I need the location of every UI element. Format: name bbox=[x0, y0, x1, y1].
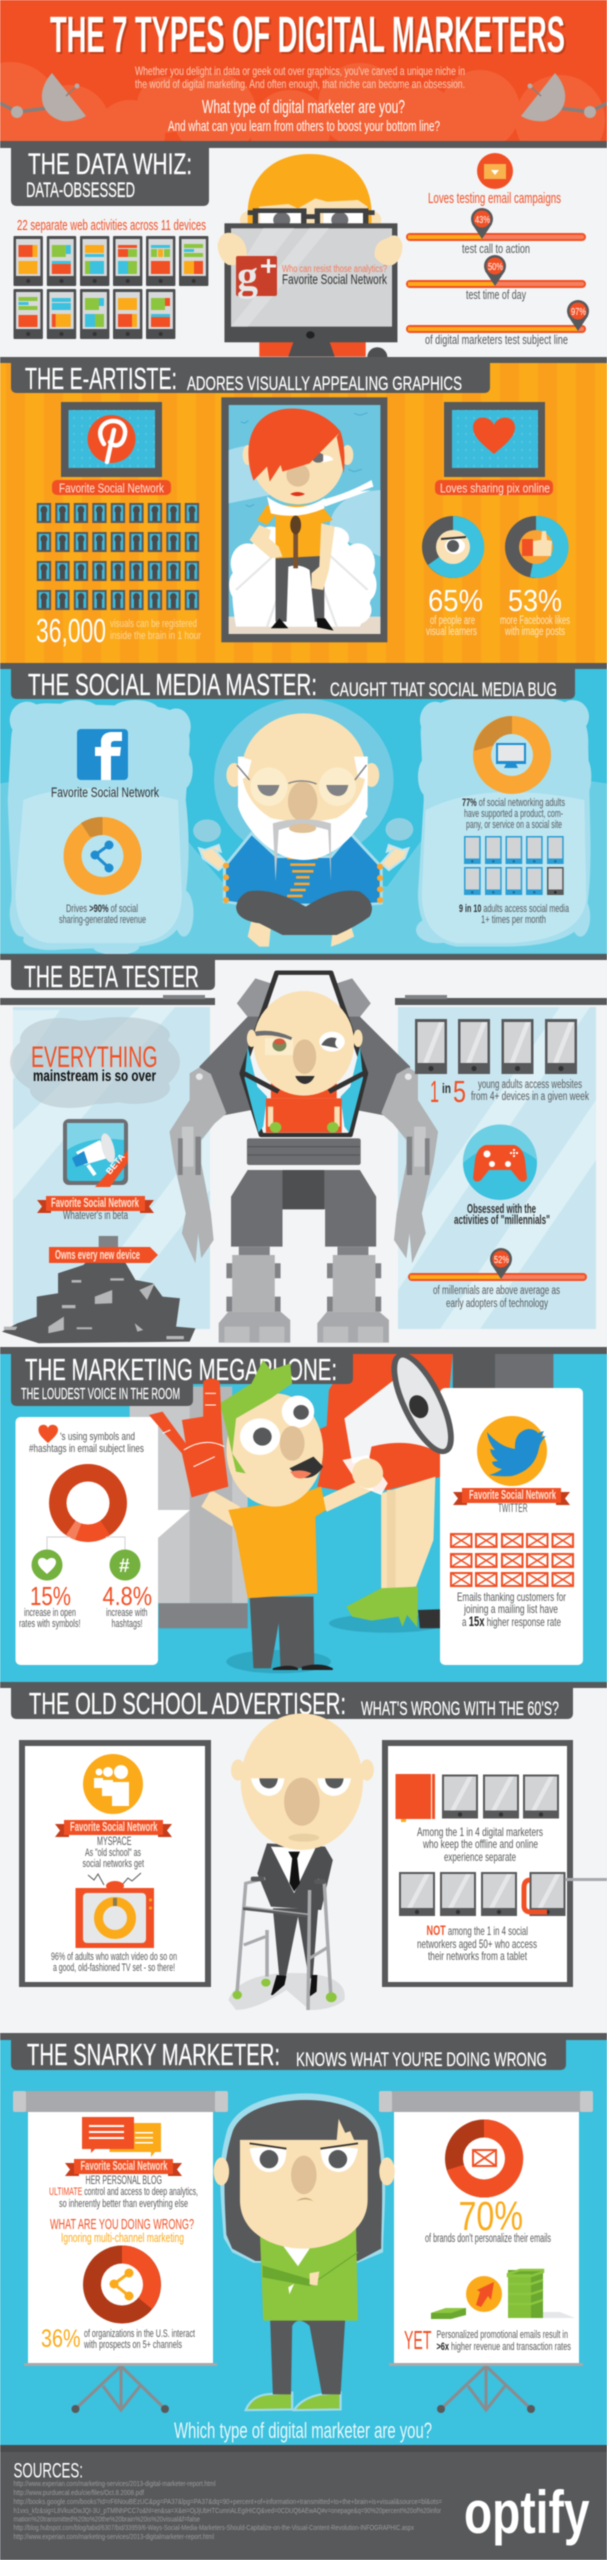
source list: h1vxs_kfz&sig=L8VkuxDwJQI-3U_pTMlNhPCC7o&hl=en&sa=X&ei=OjJjUbHTCumriALEgIHICQ&ved=0CDUQ6AEwAQ#v=onepage&q=90%20percent%20of%20infor bbox=[14, 2508, 442, 2515]
stat: 1 in 5: 5 bbox=[453, 1074, 466, 1109]
callout: what are you doing wrong: WHAT ARE YOU DOING WRONG? bbox=[50, 2216, 194, 2233]
heading: ADORES VISUALLY APPEALING GRAPHICS bbox=[187, 374, 462, 395]
stat: 36% organizations: of organizations in the U.S. interact bbox=[84, 2328, 195, 2340]
heading: THE BETA TESTER bbox=[24, 959, 199, 994]
stat: 53%: 53% bbox=[508, 583, 562, 618]
icon: left satellite dish bbox=[0, 73, 86, 121]
devices caption: 22 separate web activities across 11 devices bbox=[17, 217, 206, 234]
stat: 15% symbols: 15% bbox=[30, 1581, 71, 1611]
stat: 4.8% hashtags: increase with bbox=[106, 1607, 148, 1619]
stat bar: test call to action 43%: test call to action bbox=[462, 242, 530, 256]
ribbon: favorite social network twitter: Favorite Social Network bbox=[469, 1488, 556, 1502]
source list bbox=[14, 2481, 442, 2541]
tablets row 1 bbox=[442, 1774, 559, 1818]
heading bbox=[11, 360, 490, 396]
caption: obsessed with millennials bbox=[454, 1202, 550, 1227]
caption: 96% of adults: 96% of adults who watch video do so on bbox=[51, 1951, 177, 1963]
panel: the beta tester bbox=[0, 954, 607, 1347]
icon: speech bubbles bbox=[82, 2117, 161, 2157]
caption: not among bbox=[417, 1922, 537, 1963]
icon: book bbox=[396, 1774, 435, 1822]
tablets row 2 bbox=[399, 1872, 566, 1916]
tablet grid: 9 in 10 bbox=[464, 836, 564, 895]
text: 9 in 10 bbox=[459, 903, 570, 926]
text: 77% adults: 77% of social networking adults bbox=[462, 797, 565, 809]
stat: 4.8% hashtags: hashtags! bbox=[112, 1618, 142, 1630]
heading: THE DATA WHIZ: bbox=[28, 148, 192, 181]
ribbon: favorite social network twitter: TWITTER bbox=[498, 1501, 528, 1515]
heading: THE MARKETING MEGAPHONE: bbox=[25, 1352, 337, 1387]
source list: http://www.experian.com/marketing-services/2013-digitalmarketer-report.html bbox=[14, 2534, 214, 2541]
caption: 15x response rate: a 15x higher response rate bbox=[462, 1613, 561, 1629]
heading bbox=[11, 1351, 353, 1406]
intro text: the world of digital marketing. And often enough, that niche can become an obsession. bbox=[135, 77, 465, 91]
stat: yet 6x bbox=[404, 2325, 571, 2355]
callout: what are you doing wrong bbox=[50, 2216, 194, 2245]
caption: symbols and hashtags: 's using symbols and bbox=[60, 1431, 135, 1443]
panel: the marketing megaphone bbox=[0, 1347, 607, 1682]
source list: http://www.purduecal.edu/cie/files/Oct.8.2008.pdf bbox=[14, 2490, 144, 2497]
stat: 65%: visual learners bbox=[426, 626, 477, 638]
heading: THE OLD SCHOOL ADVERTISER: bbox=[29, 1686, 346, 1721]
stat: 15% symbols: rates with symbols! bbox=[19, 1618, 80, 1630]
label: favorite social network: Favorite Social Network bbox=[51, 784, 160, 800]
panel: the e-artiste bbox=[0, 357, 607, 663]
question: What type of digital marketer are you? bbox=[202, 97, 405, 117]
stat: 4.8% hashtags: 4.8% bbox=[102, 1581, 152, 1611]
heading bbox=[11, 148, 209, 206]
stat bar: test time of day 50%: test time of day bbox=[466, 288, 527, 302]
icon: facebook bbox=[77, 729, 128, 780]
stat: 15% symbols bbox=[19, 1550, 80, 1630]
heading: THE E-ARTISTE: bbox=[25, 361, 177, 396]
caption: 96% of adults bbox=[51, 1951, 177, 1974]
caption: among the 1 in 4: experience separate bbox=[444, 1850, 516, 1864]
heading: THE LOUDEST VOICE IN THE ROOM bbox=[21, 1386, 180, 1403]
icon: email circle bbox=[477, 153, 513, 189]
closing question: Which type of digital marketer are you? bbox=[174, 2418, 432, 2443]
stat: 53%: more Facebook likes bbox=[500, 615, 570, 627]
stat: 4.8% hashtags: # bbox=[119, 1556, 130, 1577]
stat bar: test call to action 43%: 43% bbox=[475, 215, 490, 226]
caption: not among: networkers aged 50+ who access bbox=[417, 1937, 537, 1951]
donut: symbol chart bbox=[47, 1464, 127, 1550]
ribbon: favorite social network blog bbox=[49, 2159, 198, 2210]
right presentation board bbox=[379, 2091, 593, 2413]
stat: 36,000 visuals bbox=[36, 612, 201, 649]
backdrop: wall and dress bbox=[130, 1354, 553, 1673]
intro text: Whether you delight in data or geek out over graphics, you've carved a unique niche in bbox=[135, 64, 465, 78]
ribbon: favorite social network: Whatever's in beta bbox=[63, 1210, 128, 1222]
left card bbox=[19, 1740, 211, 1987]
character: old school advertiser with walker bbox=[228, 1713, 374, 2010]
character: robot suit bbox=[170, 973, 438, 1343]
question bbox=[168, 97, 440, 135]
monitor caption: Favorite Social Network bbox=[282, 271, 388, 287]
text: 9 in 10: 1+ times per month bbox=[481, 914, 546, 926]
label: owns every new device bbox=[49, 1247, 158, 1263]
left presentation board bbox=[13, 2091, 228, 2413]
right card bbox=[382, 1740, 573, 1987]
source list: http://blog.hubspot.com/blog/tabid/6307/bid/33959/6-Ways-Social-Media-Marketers-Should-Capitalize-on-the-Visual-Content-Revolution-INFOGRAPHIC.aspx bbox=[14, 2525, 414, 2532]
question: And what can you learn from others to boost your bottom line? bbox=[168, 118, 440, 135]
stat: 1 in 5: in bbox=[442, 1080, 451, 1096]
donut: 77% support bbox=[473, 716, 551, 794]
caption: 15x response rate bbox=[457, 1590, 566, 1629]
stat: 36,000 visuals: 36,000 bbox=[36, 612, 106, 649]
ribbon: favorite social network myspace: Favorite Social Network bbox=[70, 1820, 158, 1834]
stat: 53%: with image posts bbox=[504, 626, 565, 638]
stat: 15% symbols: increase in open bbox=[24, 1607, 76, 1619]
icon: game controller bbox=[463, 1124, 537, 1200]
left window bbox=[0, 995, 215, 1329]
stat bar: 52% millennials: 52% bbox=[494, 1255, 509, 1266]
stat: 1 in 5: 1 bbox=[430, 1074, 439, 1109]
stat: 53% bbox=[500, 583, 570, 638]
panel: the data whiz bbox=[0, 148, 607, 367]
icon: money growth bbox=[431, 2270, 575, 2319]
intro text bbox=[135, 64, 465, 91]
stat: 65%: of people are bbox=[430, 615, 475, 627]
text: 77% adults bbox=[462, 797, 565, 831]
ribbon: favorite social network bbox=[37, 1196, 154, 1222]
caption: among the 1 in 4: Among the 1 in 4 digital marketers bbox=[417, 1825, 543, 1839]
ribbon: favorite social network myspace: social networks get bbox=[82, 1858, 144, 1870]
heading: THE SOCIAL MEDIA MASTER: bbox=[28, 667, 317, 702]
caption: symbols and hashtags: #hashtags in email subject lines bbox=[29, 1443, 144, 1455]
heading: DATA-OBSESSED bbox=[26, 179, 135, 202]
stat: 36,000 visuals: visuals can be registered bbox=[110, 618, 197, 630]
source list: http://www.experian.com/marketing-services/2013-digital-marketer-report.html bbox=[14, 2481, 216, 2488]
icon: pinterest frame bbox=[61, 402, 162, 477]
donut: 65% visual learners bbox=[422, 516, 484, 578]
donut: 53% facebook likes bbox=[505, 516, 569, 578]
caption: among the 1 in 4: who keep the offline and online bbox=[422, 1837, 538, 1851]
ribbon: favorite social network blog: so inherently better than everything else bbox=[59, 2198, 188, 2210]
caption: 15x response rate: joining a mailing list have bbox=[463, 1602, 558, 1616]
stat: 70% bbox=[425, 2193, 551, 2245]
stat: 1 in 5 bbox=[430, 1074, 589, 1109]
caption: obsessed with millennials: activities of "millennials" bbox=[454, 1213, 550, 1227]
stat: 36% organizations: with prospects on 5+ channels bbox=[83, 2339, 182, 2351]
stat bar: test time of day 50%: 50% bbox=[488, 262, 503, 273]
stat bar: test time of day 50% bbox=[406, 255, 586, 302]
donut: 90% sharing revenue bbox=[64, 817, 142, 895]
donut: 36% channels bbox=[83, 2246, 161, 2324]
stat: 36% organizations: 36% bbox=[41, 2325, 80, 2353]
caption: symbols and hashtags bbox=[29, 1431, 144, 1455]
monitor caption bbox=[282, 264, 388, 287]
heading bbox=[11, 2037, 566, 2072]
label: favorite social network: Favorite Social Network bbox=[59, 480, 164, 496]
icon: google plus bbox=[236, 254, 277, 300]
stat: 36,000 visuals: inside the brain in 1 hour bbox=[110, 630, 201, 642]
icon: google plus: g bbox=[237, 254, 258, 300]
panel: sources footer bbox=[0, 2445, 607, 2560]
stat: 36% organizations bbox=[41, 2325, 195, 2353]
heading: THE SNARKY MARKETER: bbox=[27, 2037, 280, 2072]
stat bar: 52% millennials: early adopters of technology bbox=[446, 1298, 548, 1310]
stat: 4.8% hashtags bbox=[102, 1550, 152, 1630]
icon: beta megaphone bbox=[63, 1119, 128, 1187]
icon: right satellite dish bbox=[521, 73, 607, 121]
character: snarky marketer bbox=[214, 2093, 395, 2410]
character: meditating master bbox=[199, 713, 408, 947]
icon: beta megaphone: BETA bbox=[104, 1151, 127, 1176]
header banner bbox=[0, 0, 607, 170]
callout: everything mainstream bbox=[31, 1041, 158, 1085]
donut: 70% personalize bbox=[445, 2119, 523, 2198]
heading bbox=[11, 957, 215, 994]
source list: http://books.google.com/books?id=rF6NouBEzUC&pg=PA37&lpg=PA37&dq=90+percent+of+information+transmitted+to+the+brain+is+visual&source=bl&ots= bbox=[14, 2499, 442, 2506]
panel: the snarky marketer bbox=[0, 2033, 607, 2445]
stat: 65%: 65% bbox=[428, 583, 483, 618]
icon: tv with donut bbox=[76, 1873, 154, 1948]
icon: myspace bbox=[83, 1754, 143, 1814]
right card bbox=[440, 1388, 583, 1665]
character: megaphone marketer and foil bbox=[149, 1360, 440, 1670]
background clouds bbox=[0, 693, 607, 955]
right window bbox=[395, 995, 607, 1329]
caption: drives 90% bbox=[59, 903, 146, 926]
heading: sources: SOURCES: bbox=[14, 2460, 83, 2482]
ribbon: favorite social network myspace bbox=[55, 1820, 172, 1870]
ribbon: favorite social network: Favorite Social Network bbox=[51, 1196, 139, 1210]
panel: the old school advertiser bbox=[0, 1682, 607, 2033]
caption: not among: their networks from a tablet bbox=[428, 1949, 527, 1963]
cloud background bbox=[0, 62, 605, 170]
tablets: 1 in 5 bbox=[415, 1019, 577, 1074]
stat bar: test call to action 43% bbox=[406, 208, 586, 256]
ribbon: favorite social network twitter bbox=[453, 1488, 570, 1515]
stat bar: subject line 97% bbox=[406, 300, 589, 347]
character: data whiz with monitor bbox=[217, 154, 402, 367]
callout: everything mainstream: mainstream is so over bbox=[33, 1068, 156, 1085]
ribbon: favorite social network myspace: As "old school" as bbox=[85, 1847, 141, 1859]
callout: everything mainstream: EVERYTHING bbox=[31, 1041, 158, 1074]
caption: obsessed with millennials: Obsessed with the bbox=[467, 1202, 536, 1216]
caption: drives 90%: sharing-generated revenue bbox=[59, 914, 146, 926]
ribbon: favorite social network blog: HER PERSONAL BLOG bbox=[86, 2173, 162, 2187]
stat: yet 6x: YET bbox=[404, 2325, 432, 2355]
gray cloud bbox=[10, 1017, 180, 1108]
caption: 96% of adults: a good, old-fashioned TV set - so there! bbox=[53, 1962, 175, 1974]
pile of devices bbox=[2, 1236, 195, 1343]
caption: among the 1 in 4 bbox=[417, 1825, 543, 1864]
callout: what are you doing wrong: Ignoring multi-channel marketing bbox=[61, 2230, 184, 2245]
icon: twitter bbox=[477, 1416, 547, 1486]
device grid bbox=[14, 236, 208, 339]
stat bar: 52% millennials bbox=[408, 1248, 587, 1310]
monitor caption: Who can resist those analytics? bbox=[282, 264, 387, 275]
label: loves sharing pix online: Loves sharing pix online bbox=[440, 480, 550, 496]
panel: the social media master bbox=[0, 663, 607, 955]
ribbon: favorite social network blog: Favorite Social Network bbox=[80, 2159, 168, 2173]
label: owns every new device: Owns every new device bbox=[55, 1248, 140, 1262]
icon: heart frame bbox=[444, 402, 545, 477]
caption: not among: NOT among the 1 in 4 social bbox=[426, 1922, 528, 1938]
ribbon: favorite social network blog: ULTIMATE control and access to deep analytics, bbox=[49, 2186, 198, 2198]
ribbon: favorite social network myspace: MYSPACE bbox=[97, 1834, 132, 1848]
left card bbox=[16, 1417, 190, 1665]
caption: drives 90%: Drives >90% of social bbox=[66, 903, 138, 915]
stat: 65% bbox=[426, 583, 483, 638]
grid of framed pictures bbox=[37, 503, 199, 610]
character: e-artiste portrait bbox=[221, 397, 387, 642]
source list: mation%20transmitted%20to%20the%20brain%20is%20visual&f=false bbox=[14, 2516, 200, 2524]
icon: heart bbox=[38, 1425, 58, 1443]
envelope grid bbox=[451, 1534, 573, 1586]
icon: megaphone bell bbox=[383, 1349, 462, 1457]
stat bar: subject line 97%: 97% bbox=[571, 307, 586, 318]
stat: 70%: 70% bbox=[458, 2193, 523, 2239]
